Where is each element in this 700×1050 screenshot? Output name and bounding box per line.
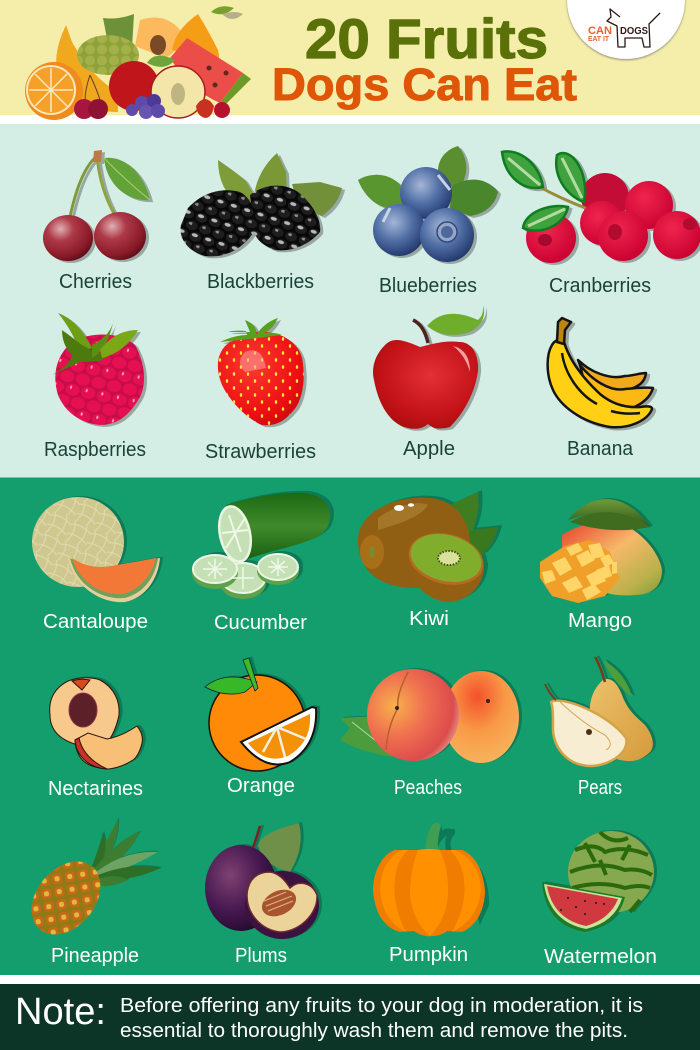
fruit: pineapple: Pineapple [51, 945, 139, 967]
fruit: watermelon: Watermelon [544, 946, 657, 968]
note text: essential to thoroughly wash them and remove the pits. [120, 1020, 628, 1042]
logo badge [567, 0, 685, 59]
fruit: pineapple [17, 818, 161, 967]
note heading: Note: [15, 991, 106, 1033]
panel: small fruits [0, 124, 700, 478]
fruit: orange: Orange [227, 775, 295, 797]
fruit: peaches: Peaches [394, 777, 462, 799]
fruit: banana: Banana [567, 438, 634, 460]
title [272, 7, 577, 110]
fruit: cucumber: Cucumber [214, 612, 307, 634]
logo badge: CAN [588, 25, 612, 37]
fruit: blackberries: Blackberries [207, 271, 314, 293]
fruit: strawberries [205, 318, 316, 463]
fruit: strawberries: Strawberries [205, 441, 316, 463]
fruit: mango: Mango [568, 610, 632, 632]
fruit: cherries: Cherries [59, 271, 132, 293]
fruit: kiwi: Kiwi [409, 608, 449, 630]
logo badge: DOGS [620, 26, 648, 37]
fruit: nectarines: Nectarines [48, 778, 143, 800]
logo badge: EAT IT [588, 36, 610, 43]
fruit: pumpkin: Pumpkin [389, 944, 468, 966]
fruit: watermelon [542, 831, 657, 968]
fruit: banana [548, 318, 653, 460]
note text: Before offering any fruits to your dog in moderation, it is [120, 995, 643, 1017]
fruit: blueberries: Blueberries [379, 275, 477, 297]
fruit: pears [545, 657, 653, 799]
fruit: peaches [340, 669, 519, 799]
header panel [0, 0, 700, 120]
fruit: cranberries [502, 151, 700, 297]
title: 20 Fruits [305, 7, 548, 70]
fruit: apple: Apple [403, 438, 455, 460]
fruit: pumpkin [373, 823, 489, 966]
fruit: cherries [43, 150, 150, 293]
fruit: raspberries: Raspberries [44, 439, 146, 461]
fruit: apple [373, 305, 484, 460]
fruit: plums [205, 823, 319, 967]
fruit: blackberries [181, 153, 342, 293]
fruit: nectarines [48, 678, 143, 800]
title: Dogs Can Eat [272, 59, 577, 110]
fruit: plums: Plums [235, 945, 287, 967]
fruit: cucumber [192, 493, 330, 634]
fruit: pears: Pears [578, 777, 622, 799]
fruit: raspberries [44, 313, 146, 461]
fruit: kiwi [358, 492, 498, 630]
fruit: mango [540, 499, 662, 632]
note text [120, 995, 643, 1042]
header illustration: fruit pile [25, 6, 251, 120]
note panel [0, 984, 700, 1050]
fruit: cantaloupe: Cantaloupe [43, 611, 148, 633]
fruit: blueberries [358, 146, 498, 297]
fruit: orange [205, 658, 316, 797]
fruit: cranberries: Cranberries [549, 275, 651, 297]
panel: larger fruits [0, 478, 700, 975]
fruit: cantaloupe [32, 497, 160, 633]
